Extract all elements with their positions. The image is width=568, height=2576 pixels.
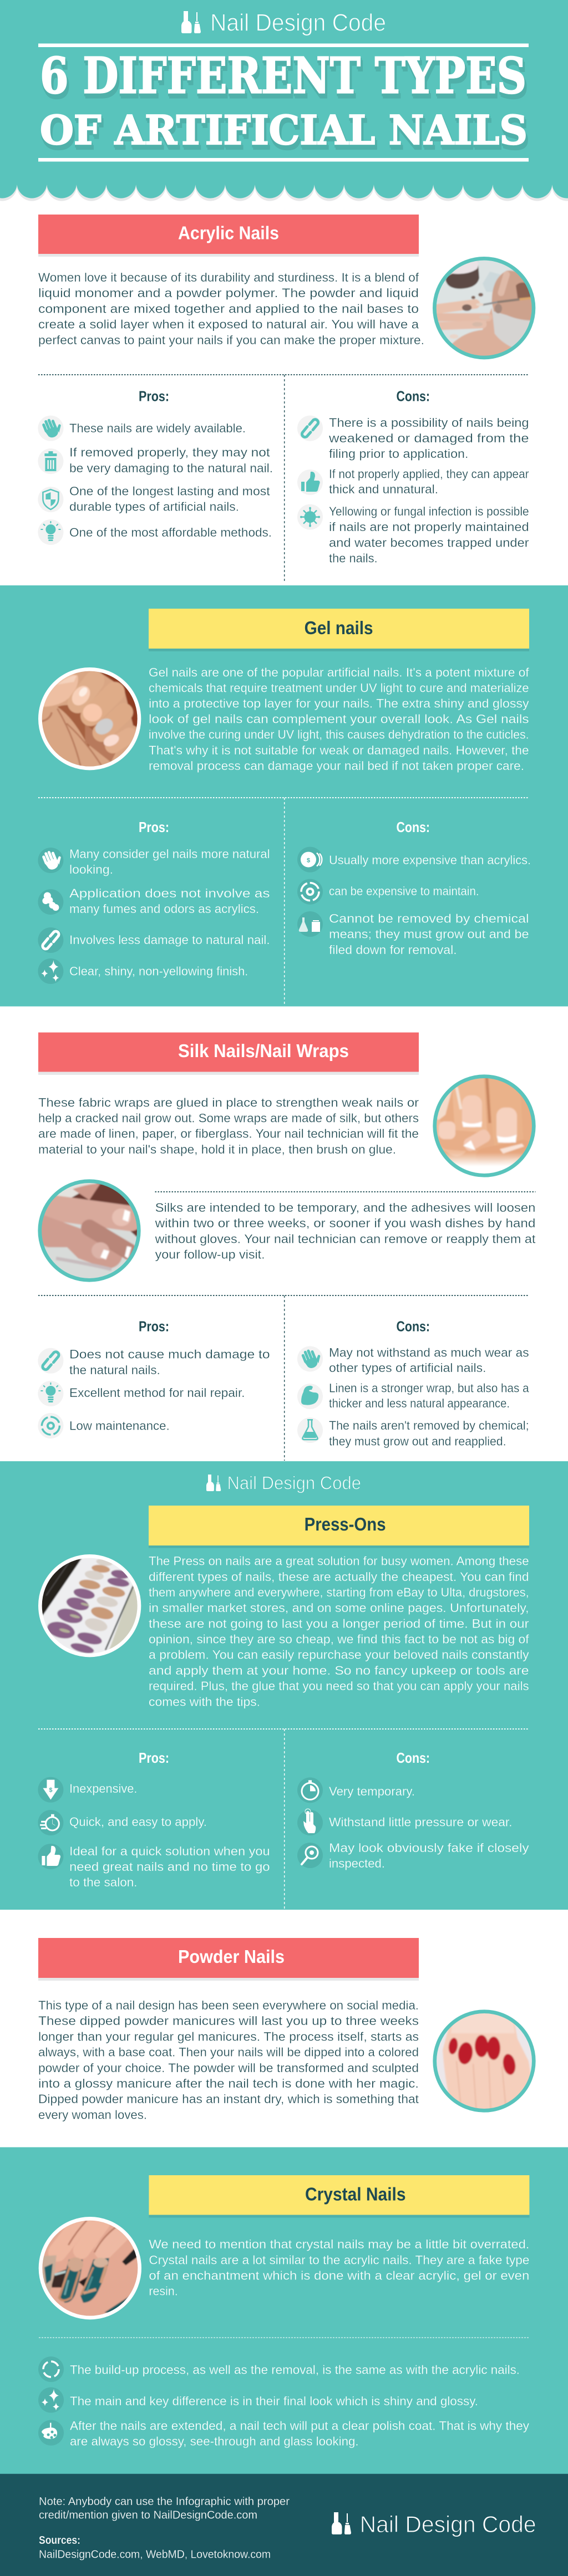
list: crystal notes: After the nails are extended, a nail tech will put a clear polish coat. That is why they xyxy=(70,2419,530,2432)
logo: Nail Design Code: Nail Design Code xyxy=(227,1472,361,1493)
divider: silk text xyxy=(155,1191,536,1192)
banner shadow xyxy=(149,1506,529,1548)
text: powder description: Dipped powder manicure has an instant dry, which is something that xyxy=(38,2092,419,2106)
heading: Acrylic Nails xyxy=(38,215,419,254)
text: sources: Sources: xyxy=(39,2534,80,2547)
text: gel description: chemicals that require treatment under UV light to cure and materialize xyxy=(149,681,529,695)
text: press-on description xyxy=(149,1554,529,1708)
text: sources: NailDesignCode.com, WebMD, Lovetoknow.com xyxy=(39,2549,271,2561)
text: gel description: involve the curing under UV light, this causes dehydration to the cuticles. xyxy=(149,728,529,742)
list: gel cons: filed down for removal. xyxy=(329,943,457,957)
scalloped header background xyxy=(0,0,568,198)
icon: trash xyxy=(38,448,63,474)
photo: silk wrapped nails xyxy=(37,1178,142,1283)
text: press-on description: in smaller market stores, and on some online pages. Unfortunately, xyxy=(149,1601,529,1615)
list: acrylic pros: be very damaging to the natural nail. xyxy=(69,461,273,475)
text: press-on description: comes with the tips. xyxy=(149,1695,260,1708)
list: gel cons: Usually more expensive than acrylics. xyxy=(329,853,531,867)
title rule bottom xyxy=(38,158,529,162)
list: acrylic cons: There is a possibility of nails being xyxy=(329,416,529,430)
text: silk description: are made of linen, paper, or fiberglass. Your nail technician will fit the xyxy=(38,1127,419,1141)
text: acrylic description: perfect canvas to paint your nails if you can make the proper mixture. xyxy=(38,333,424,347)
text: press-on description: The Press on nails are a great solution for busy women. Among these xyxy=(149,1554,529,1568)
text: press-on description: and apply them at your home. So no fancy upkeep or tools are xyxy=(149,1664,529,1677)
list: gel pros: Pros: xyxy=(139,819,169,835)
photo: acrylic application xyxy=(433,257,536,359)
icon: broken chain xyxy=(38,1348,63,1374)
icon: thumb xyxy=(297,470,323,495)
text: note: credit/mention given to NailDesignCode.com xyxy=(39,2509,257,2521)
text: gel description xyxy=(149,665,529,773)
icon: hand xyxy=(297,1346,323,1371)
divider: crystal list xyxy=(39,2337,529,2338)
photo: gel manicure xyxy=(38,667,141,771)
text: powder description: longer than your regular gel manicures. The process itself, starts as xyxy=(38,2029,419,2043)
icon: hand xyxy=(38,416,64,441)
text: press-on description: them anywhere and everywhere, starting from eBay to Ulta, drugstores, xyxy=(149,1585,529,1599)
list: silk pros: Does not cause much damage to xyxy=(69,1348,270,1361)
text: note xyxy=(39,2496,290,2521)
list: press-on pros: to the salon. xyxy=(69,1875,138,1889)
text: silk second paragraph: within two or three weeks, or sooner if you wash dishes by hand xyxy=(155,1216,535,1230)
text: powder description: into a glossy manicure after the nail tech is done with her magic. xyxy=(38,2077,419,2090)
panel: crystal nails xyxy=(0,2147,568,2475)
text: silk second paragraph: your follow-up visit. xyxy=(155,1248,265,1262)
scalloped header shadow xyxy=(0,3,568,201)
text: gel description: look of gel nails can complement your overall look. As Gel nails xyxy=(149,712,529,726)
panel: acrylic nails xyxy=(38,215,538,583)
list: press-on cons: Very temporary. xyxy=(329,1784,415,1798)
heading: Powder Nails xyxy=(38,1938,419,1978)
heading: Acrylic Nails: Acrylic Nails xyxy=(178,223,279,243)
text: gel description: That's why it is not suitable for weak or damaged nails. However, the xyxy=(149,743,529,757)
logo: Nail Design Code: Nail Design Code xyxy=(210,9,386,37)
list: acrylic pros: durable types of artificial nails. xyxy=(69,500,239,514)
list: gel pros: many fumes and odors as acrylics. xyxy=(69,902,259,916)
list: acrylic pros: Pros: xyxy=(139,388,169,405)
list: acrylic cons: If not properly applied, they can appear xyxy=(329,467,529,481)
list: silk cons xyxy=(297,1318,529,1448)
icon: light bulb xyxy=(38,1381,63,1406)
banner shadow xyxy=(38,1032,419,1075)
text: sources xyxy=(39,2534,271,2561)
heading: Crystal Nails xyxy=(149,2175,529,2215)
text: press-on description: opinion, since they are so cheap, we find this fact to be not as big of xyxy=(149,1633,529,1646)
heading: Powder Nails: Powder Nails xyxy=(178,1946,285,1967)
list: gel pros: Application does not involve as xyxy=(69,886,270,900)
list: acrylic pros: These nails are widely available. xyxy=(69,421,246,435)
banner shadow xyxy=(38,215,419,257)
text: gel description: Gel nails are one of the popular artificial nails. It's a potent mixture of xyxy=(149,665,529,679)
icon: muscle xyxy=(297,1384,323,1409)
photo: press-on nails tray xyxy=(38,1554,141,1657)
list: silk pros: Low maintenance. xyxy=(69,1419,170,1433)
heading: Press-Ons xyxy=(149,1506,529,1545)
divider: acrylic pros and cons xyxy=(38,375,529,583)
list: silk cons: Linen is a stronger wrap, but also has a xyxy=(329,1381,529,1395)
icon: light bulb xyxy=(38,519,63,545)
text: crystal description: resin. xyxy=(149,2284,178,2298)
icon: cycle xyxy=(38,2356,64,2382)
list: acrylic cons: filing prior to application. xyxy=(329,447,468,461)
list: acrylic cons: Yellowing or fungal infection is possible xyxy=(329,504,529,518)
text: powder description: always, with a base coat. Then your nails will be dipped into a colored xyxy=(38,2046,419,2059)
list: press-on cons: Withstand little pressure or wear. xyxy=(329,1815,513,1829)
text: silk description xyxy=(38,1095,419,1156)
icon: flask and trash xyxy=(297,911,323,937)
heading: Gel nails: Gel nails xyxy=(305,618,373,638)
divider: silk pros and cons xyxy=(38,1295,529,1461)
list: silk pros: Pros: xyxy=(139,1318,169,1335)
panel: gel nails xyxy=(0,585,568,1007)
list: acrylic cons: Cons: xyxy=(396,388,430,405)
icon: coins xyxy=(297,847,323,873)
heading: Press-Ons: Press-Ons xyxy=(305,1514,386,1534)
icon: fast stopwatch xyxy=(38,1810,63,1835)
photo: crystal nails xyxy=(39,2217,141,2319)
panel: header xyxy=(0,0,568,201)
list: silk cons: they must grow out and reapplied. xyxy=(329,1434,506,1448)
list: silk cons: May not withstand as much wear as xyxy=(329,1345,529,1359)
list: silk pros xyxy=(38,1318,270,1439)
text: powder description: every woman loves. xyxy=(38,2108,147,2122)
list: acrylic pros: One of the longest lasting and most xyxy=(69,484,270,498)
text: press-on description: required. Plus, the glue that you need so that you can apply your nails xyxy=(149,1679,529,1693)
title: OF ARTIFICIAL NAILS xyxy=(40,107,528,154)
text: press-on description: a problem. You can easily repurchase your beloved nails constantly xyxy=(149,1648,529,1662)
icon: magnifier with eye xyxy=(297,1843,323,1868)
icon: broken chain xyxy=(38,927,63,953)
panel: silk nails xyxy=(37,1032,537,1461)
icon: fumes xyxy=(38,889,63,915)
list: crystal notes: The main and key difference is in their final look which is shiny and glossy. xyxy=(70,2394,478,2408)
icon: broken chain xyxy=(297,416,323,441)
icon: sparkles xyxy=(38,958,63,984)
list: acrylic cons: the nails. xyxy=(329,552,378,565)
text: powder description: powder of your choice. The powder will be transformed and sculpted xyxy=(38,2061,419,2075)
title rule top xyxy=(38,43,529,47)
list: acrylic cons xyxy=(297,388,529,565)
list: gel cons: can be expensive to maintain. xyxy=(329,884,479,898)
text: gel description: into a protective top layer for your nails. The extra shiny and glossy xyxy=(149,697,529,711)
list: silk cons: other types of artificial nails. xyxy=(329,1361,486,1375)
list: silk pros: the natural nails. xyxy=(69,1363,160,1377)
icon: palette xyxy=(38,2420,64,2446)
list: acrylic cons: thick and unnatural. xyxy=(329,482,438,496)
list: silk cons: The nails aren't removed by chemical; xyxy=(329,1419,529,1432)
list: press-on cons xyxy=(297,1749,529,1870)
icon: sparkles xyxy=(38,2387,64,2412)
icon: flask xyxy=(297,1417,323,1443)
text: gel description: removal process can damage your nail bed if not taken proper care. xyxy=(149,759,524,773)
text: crystal description xyxy=(149,2237,529,2298)
icon: price down xyxy=(38,1777,63,1803)
text: powder description: This type of a nail design has been seen everywhere on social media. xyxy=(38,1998,419,2012)
list: silk pros: Excellent method for nail repair. xyxy=(69,1386,245,1400)
text: note: Note: Anybody can use the Infographic with proper xyxy=(39,2496,290,2508)
list: gel pros xyxy=(38,819,270,984)
list: crystal notes xyxy=(38,2356,530,2448)
list: gel cons: means; they must grow out and be xyxy=(329,927,529,941)
list: press-on pros: Quick, and easy to apply. xyxy=(69,1815,207,1829)
list: silk cons: thicker and less natural appearance. xyxy=(329,1396,510,1410)
heading: Gel nails xyxy=(149,609,529,649)
panel: footer xyxy=(0,2474,568,2576)
text: crystal description: Crystal nails are a lot similar to the acrylic nails. They are a fake type xyxy=(149,2253,529,2267)
text: acrylic description: create a solid layer when it exposed to natural air. You will have a xyxy=(38,318,419,331)
banner shadow xyxy=(38,1938,419,1981)
text: crystal description: We need to mention that crystal nails may be a little bit overrated. xyxy=(149,2237,529,2251)
photo: red powder nails xyxy=(432,2008,537,2114)
list: gel pros: Involves less damage to natural nail. xyxy=(69,933,270,947)
list: gel cons: Cons: xyxy=(396,819,430,835)
icon: maintenance gear xyxy=(38,1413,63,1439)
panel: powder nails xyxy=(38,1938,537,2122)
list: press-on pros: Pros: xyxy=(139,1749,169,1766)
divider: gel pros and cons xyxy=(38,798,529,1006)
list: acrylic cons: weakened or damaged from the xyxy=(328,431,529,445)
icon: thumb xyxy=(38,1844,63,1869)
icon: timer xyxy=(297,1777,323,1803)
logo: Nail Design Code: Nail Design Code xyxy=(360,2511,536,2537)
icon: maintenance gear xyxy=(297,879,323,905)
list: press-on pros: Ideal for a quick solution when you xyxy=(69,1844,270,1858)
list: acrylic pros xyxy=(38,388,273,545)
heading: Crystal Nails: Crystal Nails xyxy=(305,2184,406,2205)
text: press-on description: different types of nails, these are actually the cheapest. You can find xyxy=(149,1570,529,1584)
text: press-on description: these are not going to last you a longer period of time. But in our xyxy=(149,1616,529,1630)
list: press-on pros xyxy=(38,1749,270,1889)
heading: Silk Nails/Nail Wraps xyxy=(38,1032,419,1072)
banner shadow xyxy=(149,609,529,651)
list: acrylic pros: One of the most affordable methods. xyxy=(69,526,272,539)
icon: hand xyxy=(38,848,64,873)
list: gel cons xyxy=(297,819,531,957)
heading: Silk Nails/Nail Wraps: Silk Nails/Nail Wraps xyxy=(178,1040,349,1061)
text: powder description: These dipped powder manicures will last you up to three weeks xyxy=(38,2014,419,2028)
icon: price down: $ xyxy=(49,1787,52,1794)
text: silk description: material to your nail's shape, hold it in place, then brush on glue. xyxy=(38,1142,396,1156)
text: silk description: help a cracked nail grow out. Some wraps are made of silk, but others xyxy=(38,1111,419,1125)
list: gel pros: looking. xyxy=(69,863,113,876)
list: press-on pros: need great nails and no time to go xyxy=(69,1860,270,1874)
text: acrylic description: liquid monomer and a powder polymer. The powder and liquid xyxy=(38,286,419,300)
list: crystal notes: The build-up process, as well as the removal, is the same as with the acrylic nails. xyxy=(70,2363,520,2377)
text: crystal description: of an enchantment which is done with a clear acrylic, gel or even xyxy=(149,2268,529,2283)
text: silk second paragraph: without gloves. Your nail technician can remove or reapply them at xyxy=(155,1232,536,1246)
icon: shield xyxy=(38,487,63,512)
list: gel pros: Clear, shiny, non-yellowing finish. xyxy=(69,965,248,978)
list: acrylic cons: if nails are not properly maintained xyxy=(329,520,529,534)
panel: press-ons xyxy=(0,1461,568,1910)
list: press-on cons: inspected. xyxy=(329,1856,385,1870)
photo: french nails xyxy=(432,1073,537,1180)
list: acrylic pros: If removed properly, they may not xyxy=(69,446,270,460)
list: gel pros: Many consider gel nails more natural xyxy=(69,847,270,861)
list: silk cons: Cons: xyxy=(396,1318,430,1335)
icon: pressing fingers xyxy=(297,1809,323,1835)
text: acrylic description xyxy=(38,271,424,347)
title xyxy=(40,47,528,154)
list: crystal notes: are always so glossy, see-through and glass looking. xyxy=(70,2435,359,2448)
icon: coins: $ xyxy=(307,858,310,864)
text: silk second paragraph: Silks are intended to be temporary, and the adhesives will loosen xyxy=(155,1201,535,1215)
icon: virus xyxy=(297,504,323,530)
banner shadow xyxy=(149,2175,529,2217)
text: acrylic description: component are mixed together and applied to the nail bases to xyxy=(38,302,419,315)
list: acrylic cons: and water becomes trapped under xyxy=(329,535,529,550)
list: press-on pros: Inexpensive. xyxy=(69,1782,138,1795)
list: gel cons: Cannot be removed by chemical xyxy=(329,911,529,926)
text: silk second paragraph xyxy=(155,1201,536,1262)
text: powder description xyxy=(38,1998,419,2122)
list: press-on cons: May look obviously fake if closely xyxy=(329,1841,529,1855)
list: press-on cons: Cons: xyxy=(396,1749,430,1766)
divider: press-on pros and cons xyxy=(38,1729,529,1909)
text: silk description: These fabric wraps are glued in place to strengthen weak nails or xyxy=(38,1095,419,1109)
text: acrylic description: Women love it because of its durability and sturdiness. It is a blend of xyxy=(38,271,419,284)
